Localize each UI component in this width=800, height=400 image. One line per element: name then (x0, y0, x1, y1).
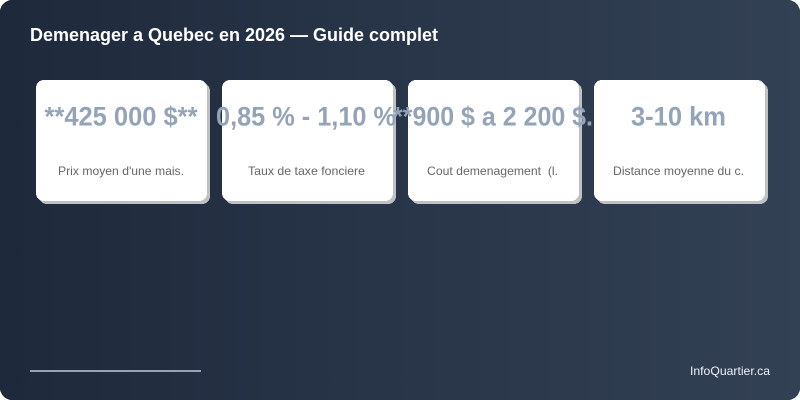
panel: average distance (594, 80, 768, 204)
value: moving cost: **900 $ a 2 200 $. (393, 102, 593, 132)
brand footer: InfoQuartier.ca (690, 364, 770, 378)
panel: average house price (36, 80, 210, 204)
label: distance: Distance moyenne du c. (613, 164, 744, 178)
label: moving cost: Cout demenagement (l. (427, 164, 558, 178)
title: Demenager a Quebec en 2026 — Guide complet (30, 25, 438, 45)
value: distance: 3-10 km (631, 102, 726, 132)
value: tax rate: 0,85 % - 1,10 % (216, 102, 396, 132)
label: price: Prix moyen d'une mais. (58, 164, 184, 178)
panel: property tax rate (216, 80, 396, 204)
panel: moving cost (393, 80, 593, 204)
label: tax rate: Taux de taxe fonciere (248, 164, 365, 178)
value: price: **425 000 $** (44, 102, 198, 132)
accent line (30, 370, 201, 372)
